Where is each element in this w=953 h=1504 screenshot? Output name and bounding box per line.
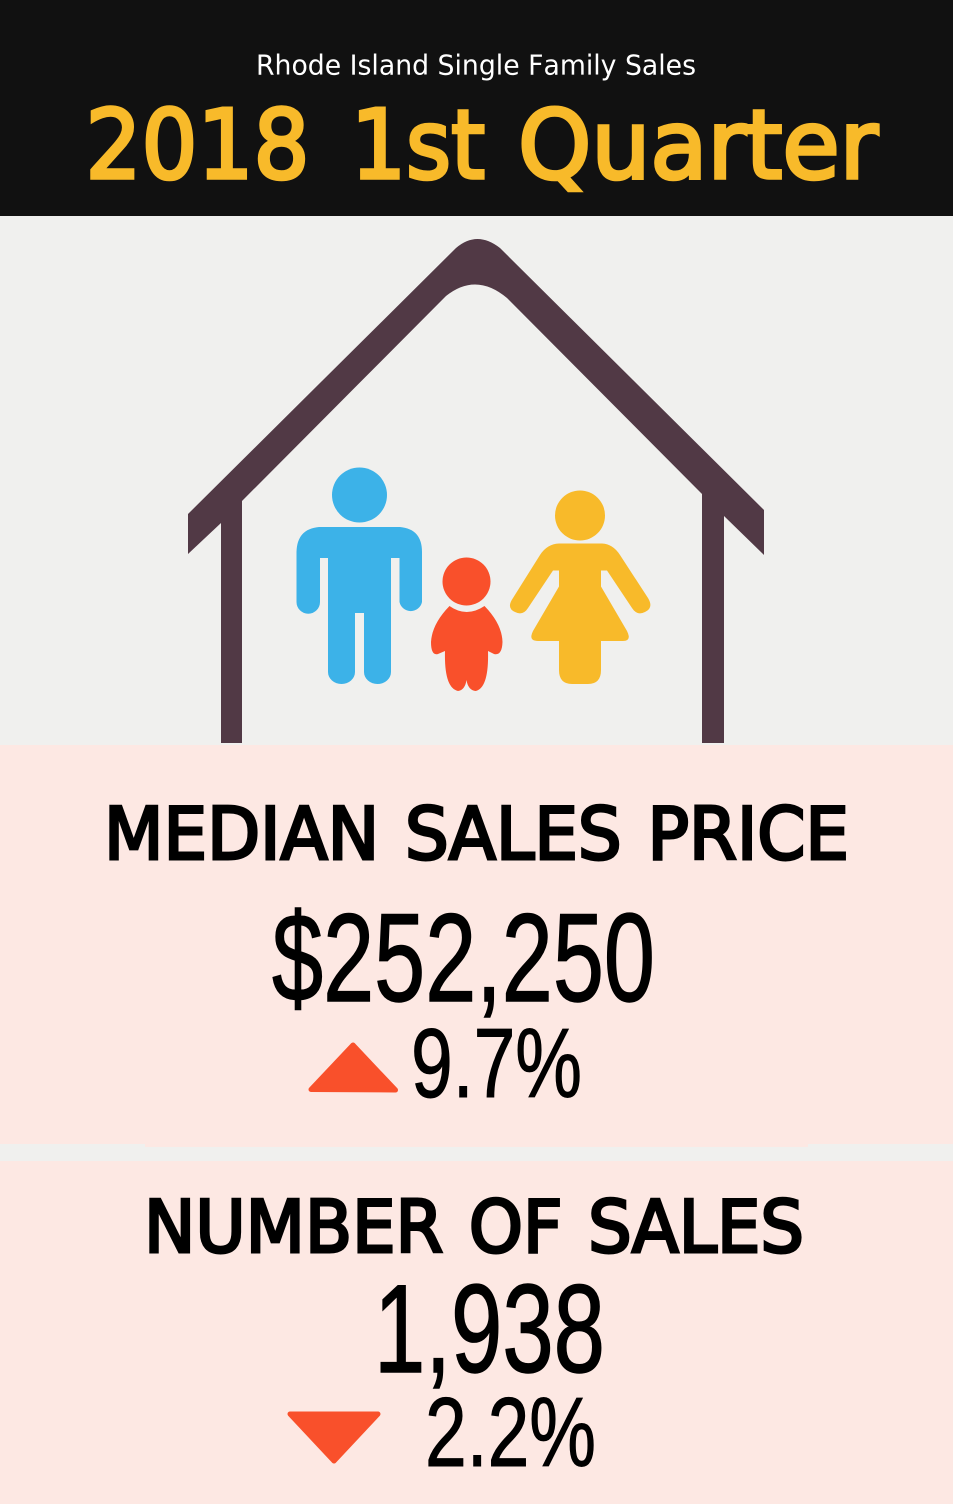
panel: median sales price: [0, 745, 953, 1147]
icon: house outline: [188, 239, 764, 743]
value: sales change: 2.2%: [425, 1377, 596, 1487]
icon: man: [296, 468, 422, 684]
icon: down arrow: [290, 1414, 378, 1461]
panel: header: [0, 0, 953, 216]
title: 2018: [86, 91, 310, 201]
value: number of sales: 1,938: [374, 1260, 605, 1399]
heading: number of sales: NUMBER OF SALES: [144, 1185, 804, 1269]
icon: up arrow: [311, 1045, 396, 1090]
title: 1st: [351, 91, 485, 201]
icon: woman: [510, 490, 650, 684]
value: median price: $252,250: [272, 889, 655, 1028]
icon: child: [431, 558, 502, 691]
title: [86, 91, 879, 201]
subtitle: Rhode Island Single Family Sales: [256, 48, 696, 82]
value: median price change: 9.7%: [411, 1008, 582, 1118]
heading: median sales price: MEDIAN SALES PRICE: [104, 792, 849, 876]
panel: number of sales: [0, 1161, 953, 1504]
title: Quarter: [518, 91, 879, 201]
icon: house with family: [188, 239, 764, 743]
